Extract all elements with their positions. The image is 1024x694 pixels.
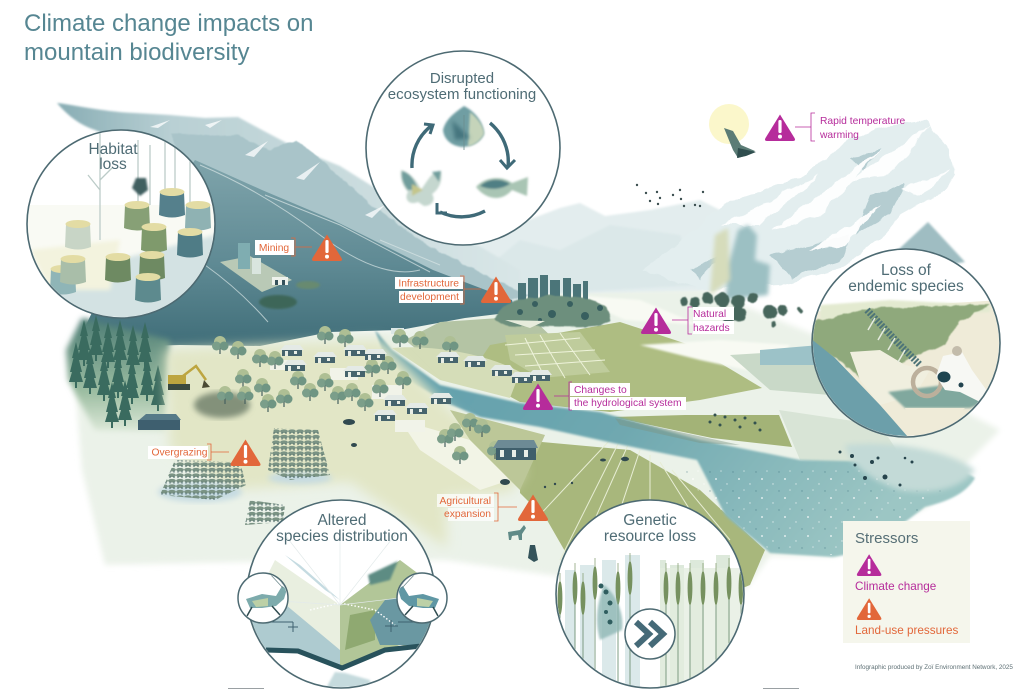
grazing animals on shoal (838, 450, 914, 486)
pale cracked ground (850, 350, 903, 386)
icon: warning (518, 494, 548, 521)
footer rule left (228, 688, 264, 689)
middle mountain range (170, 133, 530, 320)
map grid (286, 535, 396, 606)
legend title: Stressors (855, 530, 918, 547)
callout: overgrazing: Overgrazing (151, 448, 208, 458)
callout: natural hazards: hazards (693, 323, 730, 334)
mountain rock patches (690, 148, 905, 280)
icon: warning (312, 234, 342, 261)
city block cluster (495, 275, 611, 328)
icon: forward chevrons (625, 609, 675, 659)
blue and green flowers (597, 585, 622, 640)
icon: warning (481, 276, 511, 303)
big stumps (50, 220, 203, 302)
teal slope (813, 340, 907, 436)
callout: natural hazards (641, 307, 734, 334)
credit: Infographic produced by Zoï Environment Network, 2025 (855, 664, 1013, 671)
flock shadows (158, 472, 332, 502)
callout: overgrazing (148, 440, 260, 466)
river dam (391, 328, 404, 334)
far left mountain range (57, 103, 520, 305)
pale horizon strip (820, 300, 990, 320)
village houses (280, 345, 552, 421)
title: mountain biodiversity (24, 39, 249, 66)
olive river bank field (612, 415, 792, 447)
river north bank (392, 347, 520, 398)
heading: Loss of (881, 262, 932, 279)
horses (508, 525, 538, 562)
pale field grid area (505, 332, 610, 378)
village trees (212, 326, 504, 464)
icon: warning (230, 440, 260, 466)
crosshair markers (272, 620, 414, 632)
icon: leaf (443, 106, 484, 150)
legend: stressors (843, 521, 970, 643)
uniform wheat (664, 558, 743, 694)
footer rule right (763, 688, 799, 689)
pale bars left (565, 555, 640, 690)
dirt patch (194, 392, 250, 418)
barn (138, 414, 181, 430)
sun (709, 104, 749, 144)
heading: ecosystem functioning (388, 86, 536, 103)
callout: mining: Mining (259, 243, 289, 254)
icon: fish (476, 177, 528, 198)
callout: agricultural expansion (437, 493, 548, 521)
dark forested slope (75, 160, 515, 348)
snow ground (28, 205, 214, 255)
lower sand (905, 408, 965, 410)
livestock in field (708, 414, 762, 432)
forest base (66, 318, 170, 432)
large farmhouse (493, 440, 538, 460)
pale east shoal (845, 444, 975, 492)
heading: Disrupted (430, 70, 494, 87)
snow ridges on left mountains (150, 120, 385, 218)
green pasture below slope (405, 316, 560, 370)
reeds along river bank (615, 418, 740, 445)
pale east village plots (400, 420, 510, 490)
dark snag (132, 178, 148, 196)
excavator (168, 366, 210, 390)
back stumps (124, 188, 211, 230)
callout: infrastructure development (395, 276, 511, 304)
legend label: land use: Land-use pressures (855, 624, 958, 637)
grazing cattle (343, 419, 629, 488)
heading: resource loss (604, 528, 696, 545)
callout: rapid temperature warming (765, 113, 906, 141)
mountain snow streaks (720, 125, 950, 250)
vegetation band (812, 305, 990, 385)
olive farm fields (470, 322, 762, 412)
right ridge behind endemic circle (885, 222, 965, 268)
heading: Habitat (88, 141, 138, 158)
village pasture (450, 410, 545, 490)
heading: Genetic (623, 512, 677, 529)
river (375, 330, 975, 557)
village plots (270, 360, 425, 432)
pale field patches (570, 295, 790, 375)
callout: rapid temperature warming: warming (819, 130, 859, 141)
panel: altered species distribution (238, 500, 447, 694)
landslide smoke plume (710, 225, 770, 300)
migration route (310, 603, 395, 625)
eagle (724, 128, 756, 158)
skeleton spine and ribs (867, 310, 920, 365)
legend label: climate: Climate change (855, 580, 936, 593)
field gridlines (505, 333, 605, 378)
callout: changes to the hydrological system: the hydrological system (574, 398, 682, 409)
heading: species distribution (276, 528, 408, 545)
dark book spine band (266, 645, 430, 668)
ram skull (913, 346, 990, 402)
left map page (268, 560, 340, 650)
callout: infrastructure development: Infrastructure (398, 278, 459, 290)
sand ground (810, 300, 1000, 440)
panel: genetic resource loss (556, 500, 744, 694)
slope tracks (200, 165, 440, 322)
heading: Altered (317, 512, 367, 529)
panel: loss of endemic species (810, 249, 1000, 440)
icon: butterfly (401, 170, 441, 206)
title: Climate change impacts on (24, 10, 313, 37)
callout: agricultural expansion: Agricultural (439, 496, 491, 507)
burning trees (680, 292, 802, 328)
snowy right mountain (642, 120, 955, 290)
cycle arrows (412, 123, 515, 217)
dark blooms (598, 584, 612, 624)
distant bare trees (88, 130, 190, 240)
callout: changes to the hydrological system: Changes to (574, 385, 627, 396)
callout: infrastructure development: development (400, 292, 459, 303)
mottled jaw ground (888, 385, 990, 408)
village ground (165, 340, 525, 548)
landscape illustration (57, 103, 1000, 610)
icon: climate warning (857, 554, 881, 576)
diverse wheat (558, 553, 632, 694)
conifer forest (69, 315, 165, 428)
flock of birds (636, 184, 704, 207)
callout: mining (255, 234, 342, 261)
icon: antelope left (238, 572, 288, 623)
field radial lines (535, 440, 730, 560)
pale bars right (660, 555, 730, 690)
cultivated olive field (520, 440, 765, 610)
heading: endemic species (848, 278, 964, 295)
right map page (340, 560, 430, 666)
callout: agricultural expansion: expansion (444, 509, 491, 520)
panel: habitat loss (27, 130, 215, 320)
callout: natural hazards: Natural (693, 309, 726, 320)
sheep flocks (160, 428, 330, 525)
valley ground (72, 288, 1000, 590)
icon: land-use warning (857, 598, 881, 620)
panel: disrupted ecosystem functioning (366, 51, 560, 245)
callout: rapid temperature warming: Rapid temperature (820, 116, 906, 127)
icon: antelope right (397, 572, 447, 623)
distant central mountains (470, 200, 740, 295)
callout: changes to the hydrological system (523, 382, 686, 410)
river sparkles (670, 465, 950, 555)
heading: loss (99, 156, 127, 173)
bottom ice (326, 671, 371, 687)
mine building (220, 243, 320, 309)
